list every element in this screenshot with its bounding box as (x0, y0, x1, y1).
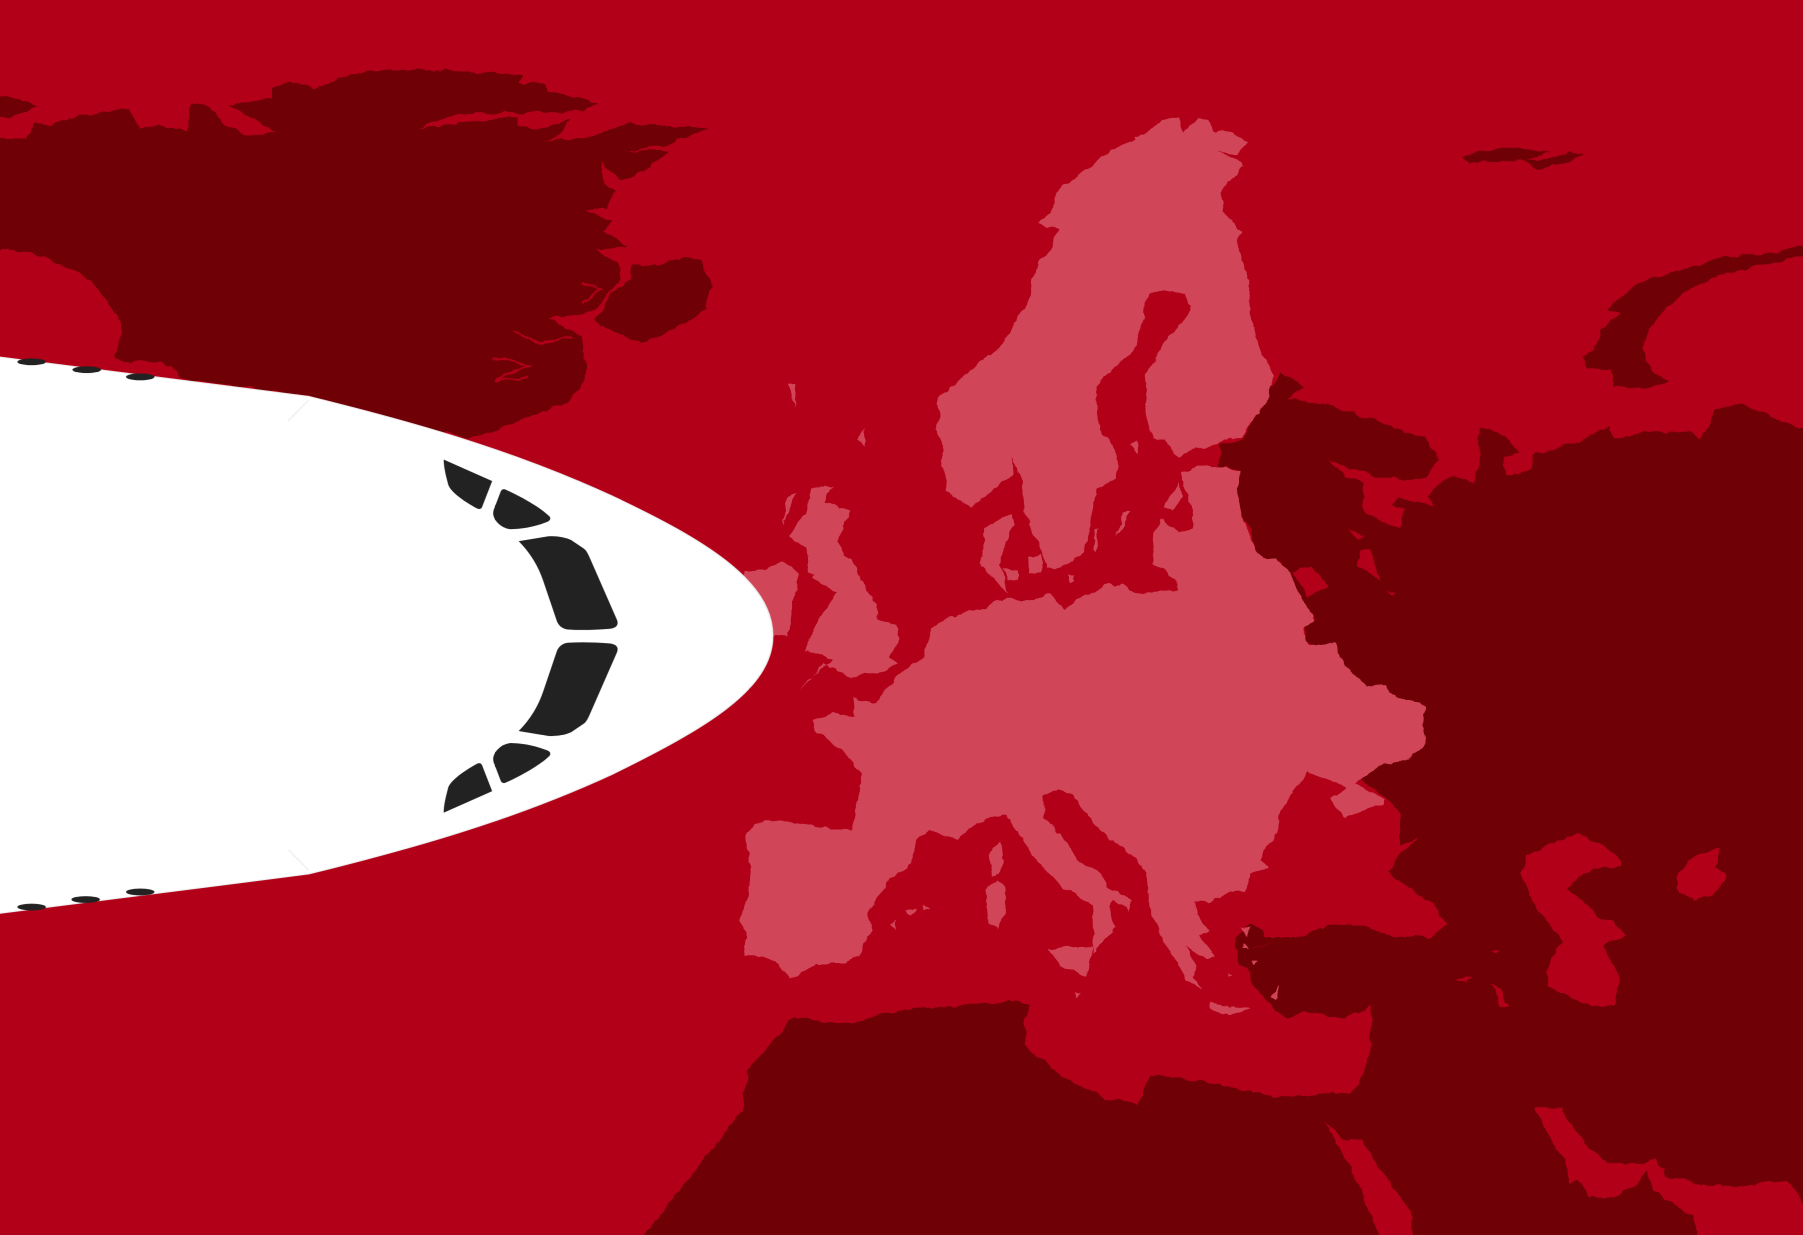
cockpit window: lower outer (444, 763, 492, 813)
passenger windows: upper row (17, 358, 155, 380)
panel seam: upper (288, 400, 309, 421)
fjords: south-east Greenland (494, 283, 601, 380)
islands: Baltic Sea (1069, 441, 1181, 582)
passenger windows: lower row (17, 889, 155, 910)
country group: continental Europe (739, 560, 1425, 990)
map: highlighted European Union countries (739, 118, 1425, 1015)
land: Svalbard (1462, 148, 1585, 170)
country: Scotland (784, 384, 867, 600)
sea: Red Sea (1325, 1122, 1412, 1235)
cockpit window: upper side (493, 489, 550, 529)
sea: Persian Gulf and Arabian Sea (1535, 1108, 1803, 1235)
land: Greenland (0, 70, 708, 437)
land: Kola peninsula and northern Russia (1219, 373, 1803, 643)
land: Canadian island at top left (0, 95, 39, 122)
country group: Scandinavia and Finland (936, 118, 1273, 568)
country: Denmark and islands (979, 514, 1041, 593)
panel seam: lower (288, 849, 309, 870)
islands: Mediterranean (891, 842, 1278, 1015)
map: inland and marginal seas (494, 283, 1803, 1235)
fuselage (0, 356, 773, 915)
lakes: eastern Turkey and Iran (1250, 940, 1510, 1007)
land: Iceland (596, 257, 713, 343)
country: England and Wales (800, 560, 899, 690)
cockpit window: upper main (519, 536, 618, 630)
cockpit window: lower side (493, 743, 550, 783)
aircraft: white fuselage nose seen from above (0, 356, 773, 915)
sea: Aral (1677, 847, 1726, 900)
country: Estonia, Latvia, Lithuania and Poland coast (924, 464, 1338, 660)
lakes: Peipus, Ladoga and Onega (1240, 513, 1396, 597)
sea: Caspian (1519, 835, 1627, 1008)
cockpit window: upper outer (444, 460, 492, 509)
land: Novaya Zemlya (1583, 232, 1803, 388)
country: Ireland (744, 563, 800, 640)
cockpit window: lower main (519, 642, 618, 736)
land: Asia, Turkey and North Africa (610, 620, 1803, 1235)
